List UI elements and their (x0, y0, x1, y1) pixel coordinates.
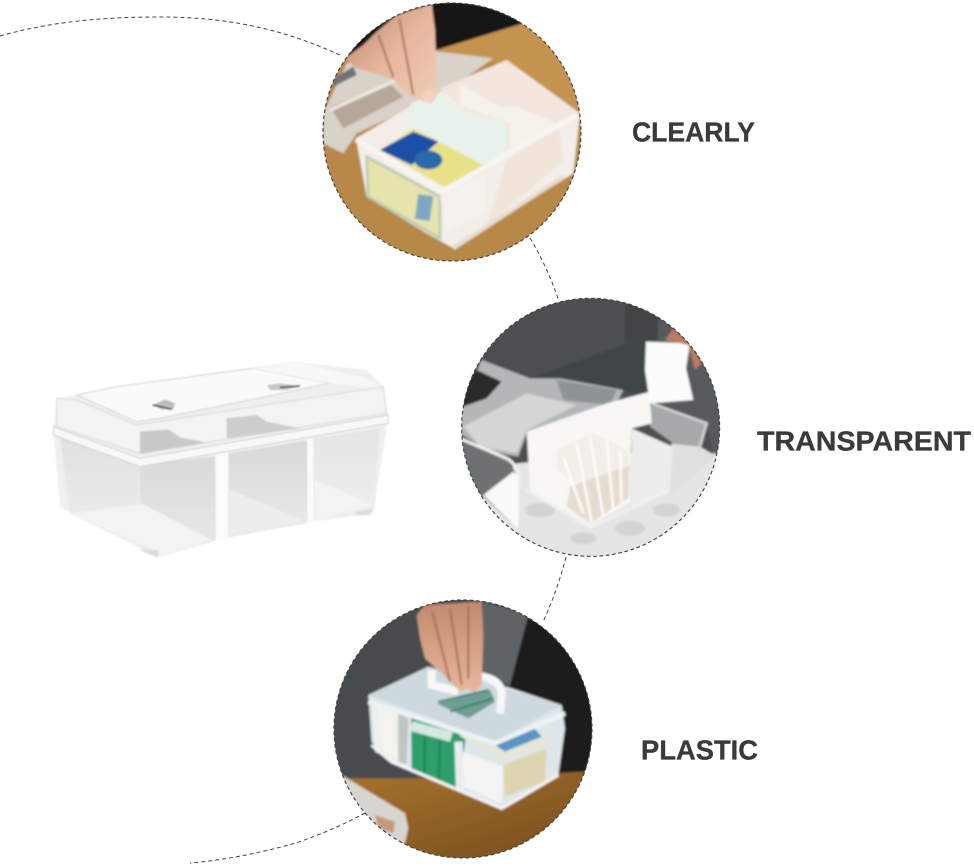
hexagon tile counter (481, 452, 717, 556)
lid (369, 667, 562, 742)
label: CLEARLY: CLEARLY (632, 116, 755, 148)
foreground tray (462, 441, 517, 524)
photo circle: clearly (310, 0, 590, 267)
green boxes (411, 717, 467, 792)
box body (368, 667, 565, 808)
front window (367, 157, 440, 238)
dashed connector circle (0, 17, 566, 863)
contents under lid (437, 690, 495, 718)
rim band (53, 415, 388, 467)
box body (60, 437, 158, 557)
feet (140, 550, 158, 557)
box floors (70, 504, 212, 557)
card package (380, 128, 487, 188)
back dividers (140, 429, 207, 454)
hand (345, 4, 437, 103)
stacked cotton pads (527, 392, 652, 525)
right compartment (650, 403, 707, 447)
fingers (665, 328, 702, 370)
handle (432, 670, 502, 713)
photo circle: plastic (325, 595, 605, 862)
product photo: clear box with lid (53, 362, 388, 557)
second box corner (342, 775, 408, 843)
latch (410, 721, 453, 742)
back panels (410, 96, 506, 163)
lid rim (368, 702, 565, 743)
label: PLASTIC: PLASTIC (641, 734, 758, 766)
hand (417, 602, 483, 692)
wooden table (348, 770, 585, 858)
blue items (495, 725, 542, 752)
dividers (216, 453, 228, 540)
box body (355, 90, 580, 250)
lid latches (153, 399, 175, 409)
cotton buds (558, 434, 629, 483)
lid behind box (323, 50, 493, 153)
label: TRANSPARENT: TRANSPARENT (757, 426, 971, 456)
rear boxes (460, 360, 623, 457)
held cotton sheet (645, 342, 693, 403)
white compartment (462, 752, 503, 803)
photo circle: transparent (450, 290, 730, 557)
lid top (77, 368, 330, 422)
box rim (356, 115, 577, 192)
